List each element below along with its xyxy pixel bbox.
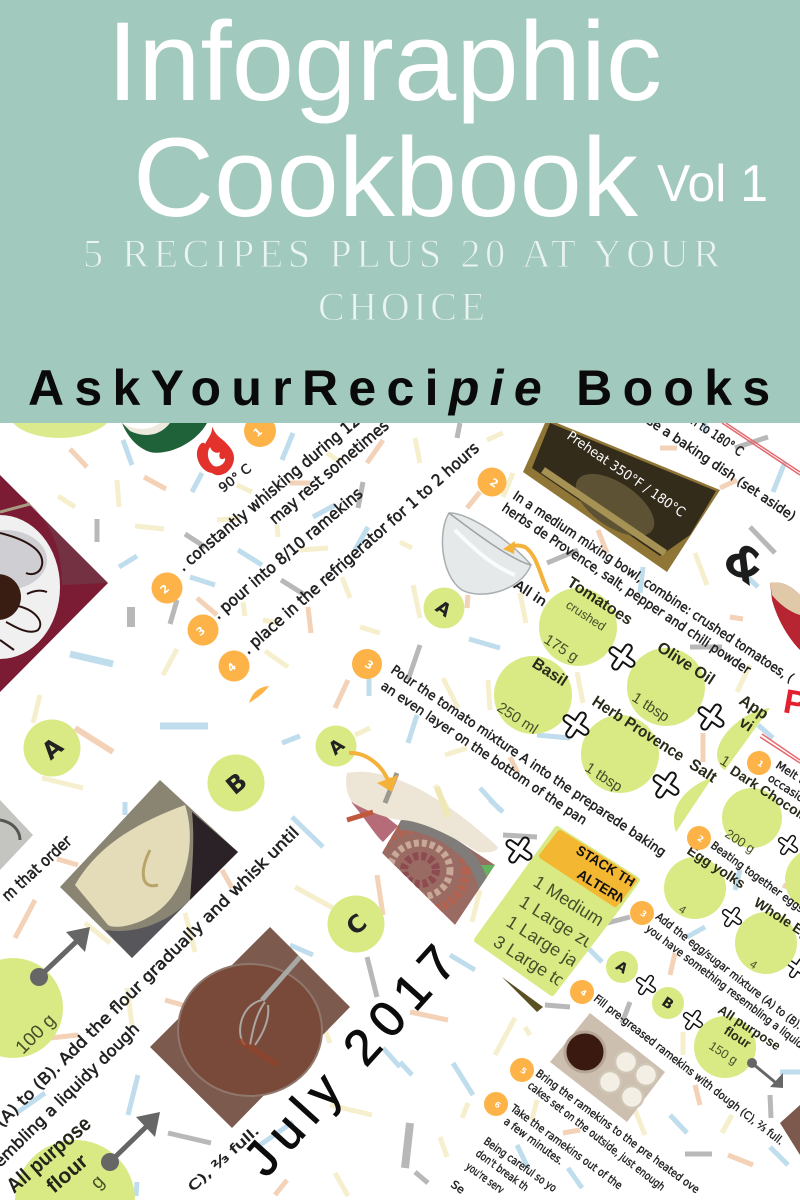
recipe card: stack the vegetables: 1 Large jap [503, 911, 590, 976]
ingredient circles, ratatouille: vi [736, 714, 756, 736]
photo: oven preheat [523, 423, 720, 572]
publisher name: AskYourRecipie Books [28, 360, 780, 416]
text: dough step, lower left: C), ⅔ full. [186, 1124, 263, 1195]
letter badges: A [37, 732, 69, 765]
lime ring fragment [13, 423, 107, 438]
volume label: Vol 1 [657, 155, 768, 213]
big ingredient circle, 100 g: 100 g [12, 1010, 60, 1059]
photo: ramekins [550, 1013, 665, 1122]
text: lava cake steps: Se [448, 1178, 467, 1197]
title: Infographic: Infographic [107, 0, 662, 124]
subtitle line 1: 5 RECIPES PLUS 20 AT YOUR [83, 231, 720, 276]
ingredient circles, lava cake [664, 762, 800, 1078]
ingredient circles, ratatouille: 1 tbsp [582, 759, 625, 796]
title: Cookbook: Cookbook [133, 115, 639, 240]
text: oven step: se a baking dish (set aside) [644, 414, 798, 524]
text: step 2 and 3 ratatouille: herbs de Provence, salt, pepper and chili powder [499, 501, 754, 678]
orange step markers, left recipe: 1 [251, 425, 265, 440]
text: step 2 and 3 ratatouille [378, 489, 796, 860]
photo: baking dish [346, 772, 498, 852]
orange step markers, lava cake [484, 751, 771, 1116]
orange step markers, left recipe: 3 [362, 658, 376, 673]
confetti background [15, 423, 800, 1196]
ingredient circles, ratatouille: App [736, 692, 771, 723]
ingredient circles, ratatouille: Tomatoes [564, 574, 636, 629]
arrow: into bowl [503, 541, 548, 592]
recipe steps text, left: . constantly whisking during 12 [173, 411, 363, 575]
text: dough step, lower left: flour [42, 1150, 92, 1198]
red divider lines [722, 423, 800, 763]
subtitle line 2: CHOICE [318, 284, 485, 329]
photo: glass mixing bowl [442, 513, 531, 594]
photo: chocolate batter with whisk [150, 927, 350, 1128]
letter badges: A [432, 597, 455, 622]
orange step markers, lava cake: 3 [639, 909, 648, 919]
recipe card: stack the vegetables: 1 Large zu [516, 891, 599, 953]
ingredient circles, ratatouille: Herb Provence [589, 693, 687, 765]
grey arrow, lava cake [747, 1058, 783, 1088]
orange step markers, left recipe [152, 415, 506, 703]
text: dough step, lower left: m that order [0, 831, 76, 905]
orange step markers, left recipe: 2 [158, 582, 172, 597]
photo: oven preheat: Preheat 350°F / 180°C [564, 428, 688, 521]
ingredient circles, lava cake: 150 g [706, 1039, 740, 1068]
letter badges: A [612, 958, 631, 978]
icon: flame [197, 426, 234, 475]
text: step 2 and 3 ratatouille: All in [511, 578, 549, 610]
green cup photo [122, 423, 207, 453]
title: July 2017: July 2017 [233, 935, 467, 1186]
ingredient circles, lava cake: 4 [676, 903, 688, 917]
ingredient circles, lava cake: All purpose [715, 1002, 784, 1053]
orange step markers, lava cake: 5 [519, 1066, 529, 1076]
ingredient circles, ratatouille: 1 tbsp [629, 689, 672, 726]
recipe steps text, left: . place in the refrigerator for 1 to 2 hours [238, 438, 483, 658]
photo: red ramekin [770, 582, 800, 650]
big ingredient circle, 100 g [0, 958, 63, 1059]
text: dough step, lower left: g [87, 1171, 109, 1194]
text: step 2 and 3 ratatouille: Pour the tomato mixture A into the preparede baking [388, 663, 668, 860]
ingredient circles, ratatouille [494, 574, 771, 832]
recipe card: stack the vegetables: ALTERN [574, 866, 630, 908]
recipe card: stack the vegetables: 1 Medium s [530, 871, 619, 938]
orange step markers, lava cake: 4 [579, 988, 589, 998]
text: oven step: n to 180° C [688, 414, 746, 460]
ingredient circles, ratatouille: 250 ml [494, 699, 541, 738]
label: 90 C: 90° C [216, 462, 255, 496]
header panel [0, 0, 800, 423]
photo: creamed batter [60, 780, 238, 958]
text: step 2 and 3 ratatouille: an even layer on the bottom of the pan [378, 679, 589, 828]
recipe card: stack the vegetables: STACK TH [573, 842, 638, 890]
photo: lava cake on plate [0, 475, 108, 692]
ingredient circles, ratatouille: Basil [529, 655, 570, 690]
orange step markers, lava cake: 2 [696, 834, 705, 844]
big ingredient circle, all purpose flour [15, 1140, 135, 1200]
ingredient circles, lava cake: 4 [747, 958, 759, 972]
orange step markers, left recipe: 2 [487, 476, 501, 491]
ampersand: & [714, 532, 774, 596]
ingredient circles, lava cake: Egg yolks [684, 842, 749, 892]
arrow: into baking dish [349, 753, 398, 792]
text: dough step, lower left: All purpose [2, 1112, 96, 1198]
ingredient circles, lava cake: 200 g [722, 826, 758, 856]
grey arrows [30, 927, 160, 1171]
photo: metal bowl corner [0, 800, 33, 870]
letter badges [24, 588, 684, 1019]
letter badges: B [659, 994, 676, 1013]
orange step markers, lava cake: 6 [493, 1100, 503, 1110]
letter badges: B [221, 767, 253, 800]
photo: chocolate corner [780, 1105, 800, 1155]
recipe steps text, left: may rest sometimes [265, 416, 393, 528]
ingredient circles, ratatouille: Salt [686, 756, 720, 787]
ingredient circles, ratatouille: 1 [717, 752, 733, 771]
plus signs [504, 642, 800, 1031]
recipe steps text, left: . pour into 8/10 ramekins [208, 484, 366, 623]
recipe card: stack the vegetables [477, 829, 638, 1012]
ingredient circles, lava cake: flour [721, 1023, 754, 1051]
letter badges: A [325, 735, 349, 760]
orange step markers, lava cake: 1 [756, 759, 766, 769]
ingredient circles, ratatouille: 175 g [541, 631, 582, 666]
ingredient circles, ratatouille: crushed [563, 598, 608, 634]
photo: ratatouille [382, 820, 495, 925]
orange step markers, left recipe: 4 [225, 660, 239, 675]
recipe card: stack the vegetables: 3 Large to [490, 931, 569, 991]
text: lava cake steps: a few minutes. [501, 1115, 566, 1168]
ingredient circles, ratatouille: Olive Oil [654, 639, 718, 689]
text: lava cake steps [448, 759, 800, 1197]
orange step markers, left recipe: 3 [194, 624, 208, 639]
letter badges: C [341, 908, 372, 941]
text: dough step, lower left: (A) to (B). Add the flour gradually and whisk until [0, 823, 303, 1131]
